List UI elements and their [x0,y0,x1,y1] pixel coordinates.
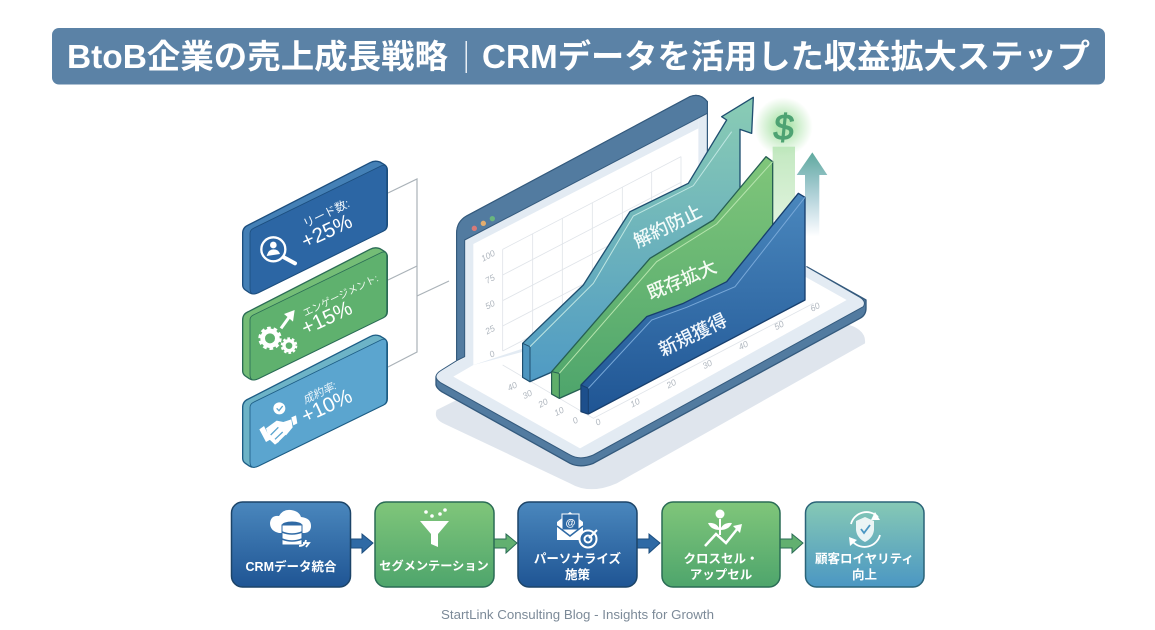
x axis labels: 50 [772,319,786,332]
icon: cloud database [270,510,311,547]
arrow 1 [351,534,373,553]
up arrow [797,152,827,237]
layer: churn prevention [523,97,753,382]
icon: funnel [420,508,449,547]
KPI cards [243,161,387,467]
x axis labels: 60 [808,300,822,314]
x axis labels: 40 [506,380,519,393]
layer label: 新規獲得 [655,309,730,360]
step: CRM integration: CRMデータ統合 [246,559,337,574]
label: close rate: 成約率: [301,379,339,407]
arrow 3 [637,534,660,553]
icon: magnifier with person [261,237,295,263]
y axis labels: 50 [483,298,497,311]
title banner: CRMデータを活用した収益拡大ステップ [482,38,1090,75]
title banner [52,28,1105,84]
step: customer loyalty [806,502,924,587]
step: customer loyalty: 向上 [852,567,877,582]
step: personalized measures: パーソナライズ [534,551,622,566]
arrow 2 [494,534,517,553]
value: +25%: +25% [298,210,356,253]
value: +10%: +10% [298,384,356,428]
step: segmentation [375,502,494,587]
step: personalized measures: 施策 [565,567,590,582]
y axis labels: 75 [483,272,497,286]
x axis labels: 0 [571,415,580,426]
step: cross-sell and upsell [662,502,780,587]
x axis labels: 10 [552,405,566,418]
x axis labels: 20 [664,377,678,391]
card: lead count [243,161,387,294]
icon: shield with cycle [849,512,880,547]
process flow [232,502,924,587]
laptop screen [457,95,707,365]
step: cross-sell and upsell: アップセル [690,568,753,582]
x axis labels: 30 [521,388,534,401]
layer label: 既存拡大 [644,256,720,304]
laptop base [436,240,866,466]
x axis labels [506,300,822,428]
icon: mail and target: @ [566,518,576,529]
label: lead count: リード数: [301,196,352,231]
laptop with growth chart [436,95,866,489]
step: cross-sell and upsell: クロスセル・ [683,552,759,566]
label: engagement: エンゲージメント: [301,272,380,319]
y axis labels [479,248,497,360]
connector lines [388,179,449,367]
step: segmentation: セグメンテーション [379,558,489,573]
footer: StartLink Consulting Blog - Insights for Growth [441,607,714,622]
layer: existing expansion [552,157,773,398]
step: CRM integration [232,502,350,587]
x axis labels: 40 [737,339,750,352]
icon: handshake with check [259,402,297,445]
layer: new acquisition [581,193,805,414]
y axis labels: 25 [482,323,497,337]
title banner: BtoB企業の売上成長戦略 [67,38,448,75]
arrow 4 [780,534,803,553]
step: personalized measures [518,502,637,587]
chart grid [503,157,813,418]
x axis labels: 20 [535,396,550,410]
y axis labels: 100 [479,248,497,263]
card: close rate [243,335,387,467]
dollar glow [754,97,813,220]
x axis labels: 0 [593,416,603,428]
window buttons [472,226,477,231]
y axis labels: 0 [487,348,497,360]
layer label: 解約防止 [630,201,705,252]
x axis labels: 10 [628,396,642,409]
icon: gears with arrow [260,310,296,353]
value: +15%: +15% [298,296,356,340]
icon: sprout and trend [705,510,742,546]
icon: dollar sign: $ [772,106,796,147]
laptop shadow [436,323,865,489]
card: engagement [243,248,387,380]
step: customer loyalty: 顧客ロイヤリティ [815,551,914,566]
x axis labels: 30 [701,358,714,371]
